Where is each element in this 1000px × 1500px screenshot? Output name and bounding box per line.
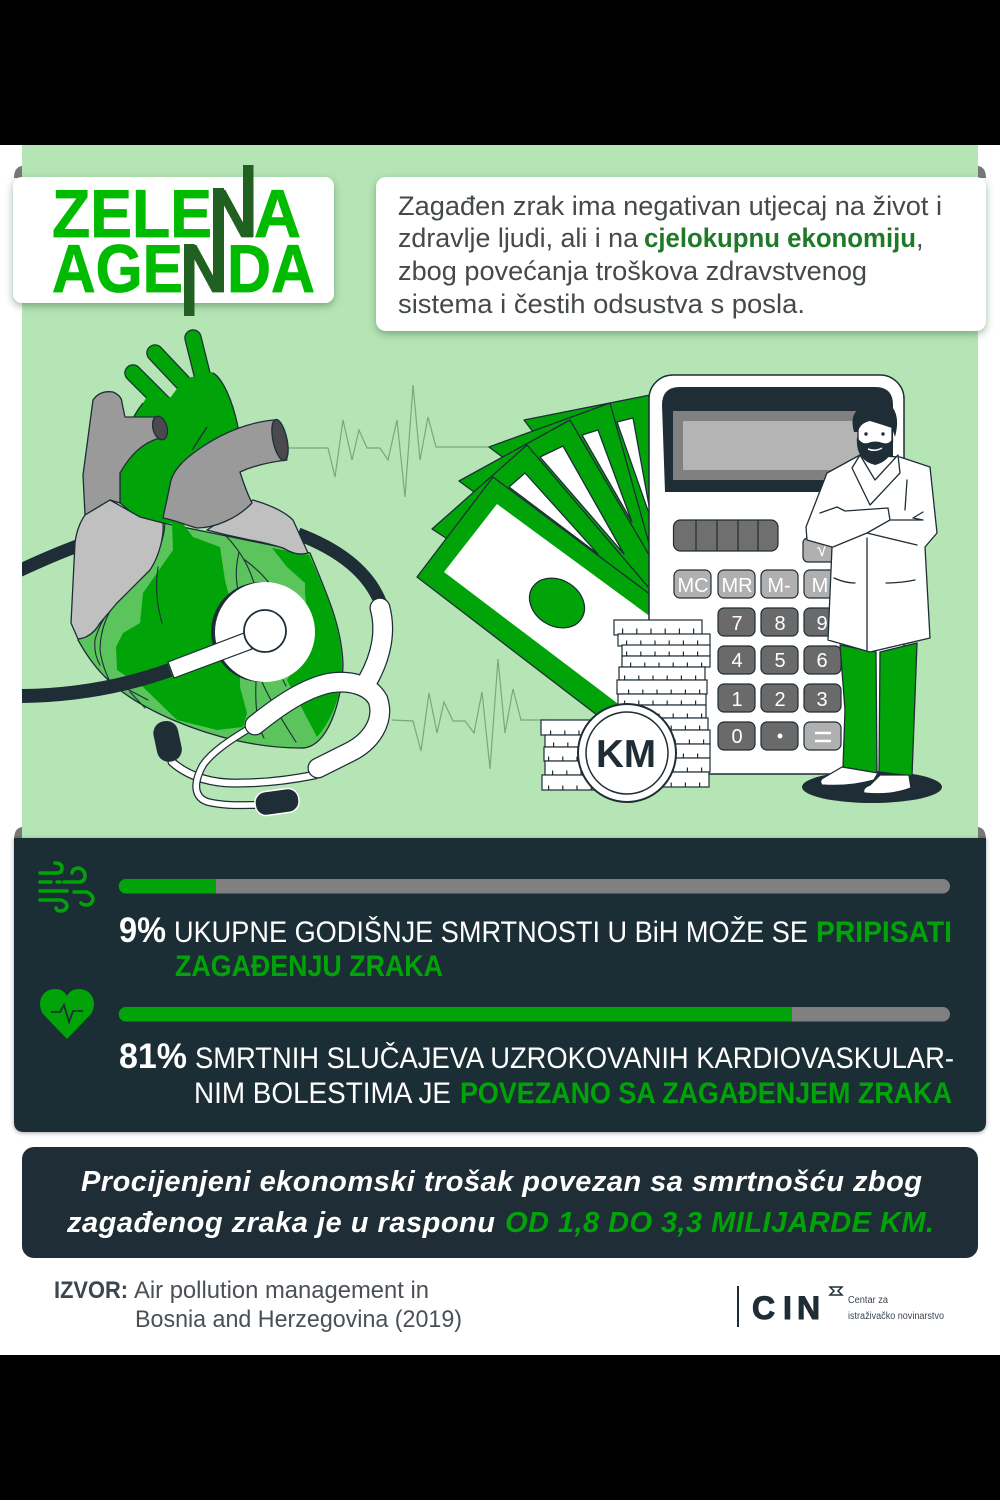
coin stack small [541, 720, 601, 790]
intro text card: , [916, 223, 924, 253]
calculator screen [662, 387, 893, 492]
stat: 9 percent: 9% [119, 911, 166, 950]
coin stack large [614, 620, 710, 787]
shoes [821, 767, 911, 794]
left vessel [83, 392, 166, 515]
CIN logo: Centar za [848, 1295, 888, 1306]
economic cost callout: zagađenog zraka je u rasponu [66, 1207, 495, 1239]
logo: Zelena Agenda: N [181, 231, 228, 307]
ear tip left [151, 719, 184, 764]
heart muscle right [272, 548, 342, 737]
calculator keys: 1 [731, 689, 743, 711]
lab coat [806, 455, 937, 652]
economic cost callout: Procijenjeni ekonomski trošak povezan sa smrtnošću zbog [81, 1166, 922, 1198]
calculator keys: 2 [774, 689, 786, 711]
bar: 81 percent [119, 1007, 950, 1022]
intro text card: zdravlje ljudi, ali i na [398, 223, 639, 253]
calculator keys: MC [677, 575, 709, 597]
calculator keys: 8 [774, 613, 786, 635]
stethoscope [22, 582, 383, 817]
chest piece [168, 582, 315, 682]
floor shadow [802, 771, 942, 803]
left atrium [71, 500, 163, 639]
stethoscope back tube [10, 534, 381, 604]
head [852, 402, 897, 465]
KM coin [578, 704, 676, 802]
banknote 5 [524, 395, 665, 600]
source [54, 1277, 462, 1333]
economic cost callout [22, 1147, 978, 1258]
logo: Zelena Agenda: ZELE [52, 176, 212, 252]
stat: 9 percent: PRIPISATI [816, 916, 952, 949]
CIN logo [737, 1286, 944, 1327]
banknote 1 [417, 477, 655, 735]
right atrium [207, 500, 308, 554]
icon: wind [40, 863, 93, 911]
front tube [22, 670, 170, 696]
icon: heart [71, 338, 343, 748]
source: Air pollution management in [134, 1277, 429, 1304]
bar: 9 percent [119, 879, 950, 894]
ear tip right [254, 787, 300, 817]
CIN logo: istraživačko novinarstvo [848, 1311, 944, 1322]
source: IZVOR: [54, 1277, 128, 1304]
ECG line lower [392, 659, 545, 769]
banknote 4 [489, 403, 655, 590]
stat: 9 percent: UKUPNE GODIŠNJE SMRTNOSTI U BiH MOŽE SE [174, 915, 808, 949]
logo: Zelena Agenda: N [210, 176, 257, 252]
logo: Zelena Agenda: AGE [52, 231, 183, 307]
calculator keys: 6 [816, 650, 828, 672]
calculator keys: M [812, 575, 828, 597]
calculator body [649, 375, 904, 774]
calculator keys: 4 [731, 650, 743, 672]
logo: Zelena Agenda: DA [227, 231, 315, 307]
calculator keys: 0 [731, 726, 743, 748]
source: Bosnia and Herzegovina (2019) [135, 1306, 462, 1333]
stat: 9 percent: ZAGAĐENJU ZRAKA [175, 950, 443, 983]
stat: 81 percent: NIM BOLESTIMA JE [194, 1077, 451, 1110]
calculator keys: 3 [816, 689, 828, 711]
man in white coat [802, 402, 942, 803]
heart lower body [78, 523, 343, 748]
stat: 9 percent [119, 911, 952, 983]
stat: 81 percent [119, 1037, 954, 1110]
trousers [840, 643, 917, 776]
intro text card [376, 177, 986, 331]
ECG line upper [287, 385, 490, 497]
calculator keys: 7 [731, 613, 743, 635]
intro text card: cjelokupnu ekonomiju [644, 223, 916, 253]
heart aorta arch [120, 338, 240, 525]
banknote 2 [432, 445, 655, 620]
icon: heart pulse [40, 989, 94, 1039]
logo: Zelena Agenda: A [254, 176, 301, 252]
stat: 81 percent: POVEZANO SA ZAGAĐENJEM ZRAKA [460, 1077, 952, 1110]
calculator keys [674, 538, 841, 750]
tubes [172, 608, 383, 805]
calculator keys: 5 [774, 650, 786, 672]
calculator keys: √ [817, 539, 828, 561]
intro text card: sistema i čestih odsustva s posla. [398, 289, 805, 319]
calculator keys: MR [721, 575, 753, 597]
banknote 3 [459, 420, 655, 600]
heart muscle left [116, 522, 247, 730]
economic cost callout: OD 1,8 DO 3,3 MILIJARDE KM. [505, 1207, 934, 1239]
illustration panel background [22, 145, 978, 838]
calculator keys: M- [767, 575, 791, 597]
intro text card: zbog povećanja troškova zdravstvenog [398, 256, 867, 286]
logo: Zelena Agenda [13, 165, 334, 316]
KM coin: KM [596, 733, 656, 776]
heart veins [95, 523, 296, 742]
aorta [163, 420, 287, 528]
stat: 81 percent: 81% [119, 1037, 187, 1076]
statistics panel [14, 838, 986, 1132]
intro text card: Zagađen zrak ima negativan utjecaj na život i [398, 191, 942, 221]
banknotes fan [417, 395, 665, 735]
solar strip [674, 520, 778, 551]
calculator keys: 9 [816, 613, 828, 635]
calculator [649, 375, 904, 774]
CIN logo: CIN [752, 1290, 820, 1326]
